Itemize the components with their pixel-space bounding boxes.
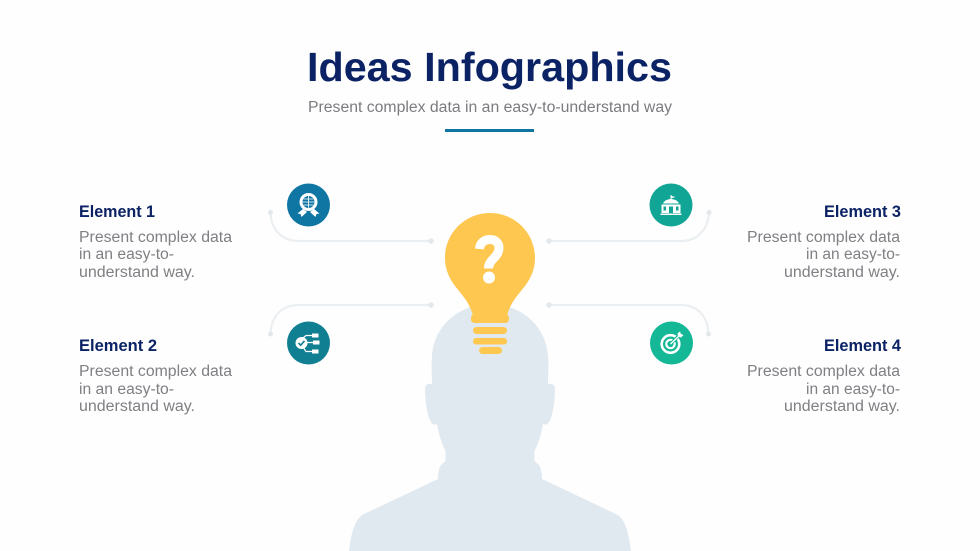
text block: element 2 <box>79 337 232 415</box>
question mark <box>480 240 499 284</box>
heading: element 2: Element 2 <box>79 337 157 355</box>
bulb glass <box>445 213 535 316</box>
body: element 2 <box>79 363 232 415</box>
body: element 2: in an easy-to- <box>79 381 174 398</box>
body: element 2: Present complex data <box>79 363 232 380</box>
bulb collar <box>471 314 509 323</box>
connector: element 2 <box>268 302 434 336</box>
icon: target with dart <box>650 322 693 364</box>
body: element 1: understand way. <box>79 264 195 281</box>
connector: element 3 <box>546 210 712 244</box>
body: element 3: in an easy-to- <box>806 246 900 263</box>
connector: element 1 <box>268 210 434 244</box>
connector: element 4 <box>546 302 711 336</box>
body: element 3: understand way. <box>784 264 900 281</box>
body: element 2: understand way. <box>79 398 195 415</box>
text block: element 1 <box>79 203 232 281</box>
body: element 4: in an easy-to- <box>806 381 900 398</box>
title underline <box>445 129 534 132</box>
text block: element 3 <box>747 203 901 281</box>
text block: element 4 <box>747 337 902 415</box>
person silhouette <box>349 304 631 551</box>
bulb base bars <box>473 327 507 354</box>
body: element 1: Present complex data <box>79 229 232 246</box>
body: element 3 <box>747 229 900 281</box>
body: element 4: understand way. <box>784 398 900 415</box>
body: element 1: in an easy-to- <box>79 246 174 263</box>
icon: workflow check <box>287 322 330 364</box>
body: element 4: Present complex data <box>747 363 900 380</box>
subtitle: Present complex data in an easy-to-understand way <box>308 99 672 116</box>
heading: element 1: Element 1 <box>79 203 155 221</box>
icon: building <box>650 184 692 226</box>
heading: element 3: Element 3 <box>824 203 901 221</box>
title: Ideas Infographics <box>307 44 672 90</box>
body: element 4 <box>747 363 900 415</box>
body: element 1 <box>79 229 232 281</box>
body: element 3: Present complex data <box>747 229 900 246</box>
icon: award globe <box>287 184 330 226</box>
light bulb with question mark <box>445 213 535 354</box>
heading: element 4: Element 4 <box>824 337 902 355</box>
